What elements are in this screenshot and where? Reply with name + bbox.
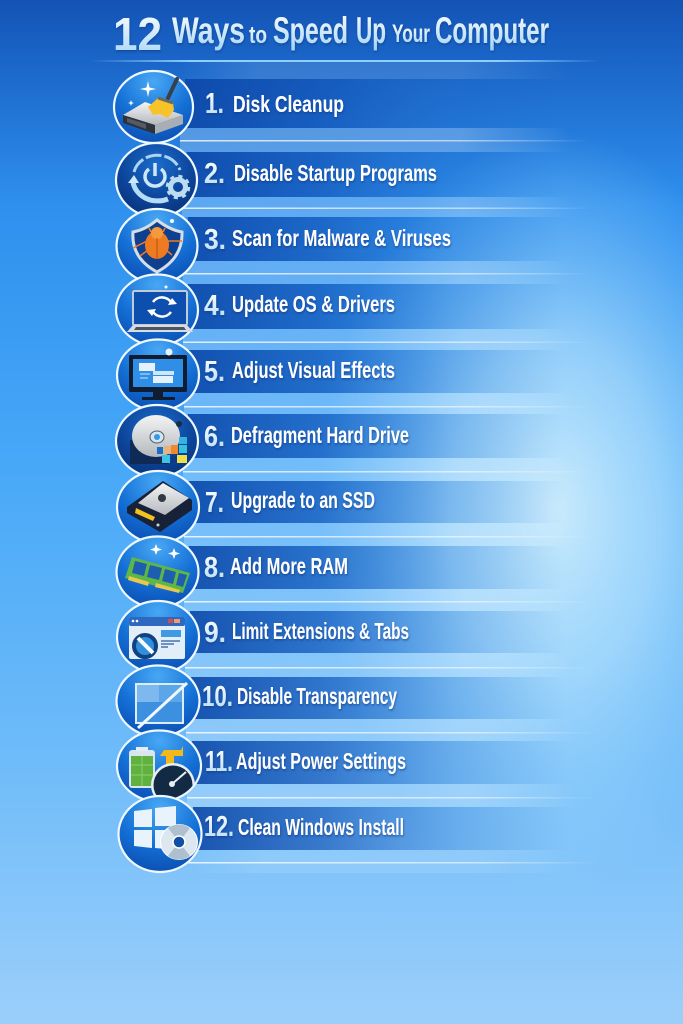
label: 11.	[205, 746, 233, 778]
row 11: Adjust Power Settings	[117, 730, 597, 807]
label: 6.	[204, 421, 225, 453]
title: 12	[113, 8, 162, 60]
label: Disk Cleanup	[233, 91, 344, 117]
label: Disable Startup Programs	[234, 160, 437, 186]
label: Upgrade to an SSD	[231, 487, 375, 513]
label	[204, 617, 409, 649]
label: Adjust Power Settings	[236, 748, 406, 774]
title	[113, 8, 549, 60]
label	[204, 158, 437, 190]
label	[204, 552, 348, 584]
label	[204, 290, 395, 322]
row 8: Add More RAM	[116, 536, 594, 611]
label: Add More RAM	[230, 553, 348, 579]
icon: RAM module	[116, 536, 198, 608]
title: Your	[392, 20, 430, 48]
label: Defragment Hard Drive	[231, 422, 409, 448]
label: 9.	[204, 617, 226, 649]
icon: broom over disk	[114, 71, 193, 143]
row 6: Defragment Hard Drive	[116, 405, 593, 481]
label	[204, 356, 395, 388]
top light strip	[180, 62, 570, 79]
icon: crossed-out window	[116, 666, 200, 736]
label: 5.	[204, 356, 225, 388]
label: Scan for Malware & Viruses	[232, 225, 451, 251]
label: 1.	[205, 88, 224, 120]
list of 12 tips	[114, 71, 598, 873]
label	[204, 421, 409, 453]
row 7: Upgrade to an SSD	[117, 471, 594, 546]
icon: shield with bug	[116, 209, 198, 283]
label: 12.	[204, 811, 234, 843]
label: 4.	[204, 290, 226, 322]
row 3: Scan for Malware & Viruses	[116, 209, 593, 284]
row 4: Update OS & Drivers	[116, 274, 593, 350]
title rule	[90, 60, 600, 62]
label: 10.	[202, 681, 233, 713]
label	[204, 224, 451, 256]
title: to	[249, 22, 267, 49]
row 2: Disable Startup Programs	[116, 143, 592, 217]
label	[205, 88, 344, 120]
label: 3.	[204, 224, 226, 256]
title: Ways	[172, 10, 245, 51]
label: Update OS & Drivers	[232, 291, 395, 317]
label: Clean Windows Install	[238, 814, 404, 840]
label: 2.	[204, 158, 225, 190]
label	[204, 811, 404, 843]
label	[202, 681, 397, 713]
icon: windows logo and disc	[118, 796, 202, 872]
icon: disc with fragments	[116, 405, 198, 477]
label: 8.	[204, 552, 225, 584]
icon: power and gear	[116, 143, 197, 217]
row 9: Limit Extensions & Tabs	[117, 601, 595, 677]
label: Adjust Visual Effects	[232, 357, 395, 383]
row 12: Clean Windows Install	[118, 796, 598, 873]
icon: browser window blocked	[117, 601, 199, 673]
title: Computer	[435, 10, 549, 51]
label: Limit Extensions & Tabs	[232, 618, 409, 644]
label: 7.	[205, 487, 224, 519]
title: Up	[356, 10, 386, 51]
icon: solid state drive	[117, 471, 199, 543]
label: Disable Transparency	[237, 683, 397, 709]
icon: monitor with windows	[117, 340, 199, 410]
title: Speed	[273, 10, 348, 51]
row 1: Disk Cleanup	[114, 71, 590, 152]
row 10: Disable Transparency	[116, 666, 596, 741]
icon: battery and gauge	[117, 730, 201, 807]
label	[205, 487, 375, 519]
row 5: Adjust Visual Effects	[117, 340, 594, 414]
icon: laptop with refresh	[116, 274, 198, 346]
label	[205, 746, 406, 778]
